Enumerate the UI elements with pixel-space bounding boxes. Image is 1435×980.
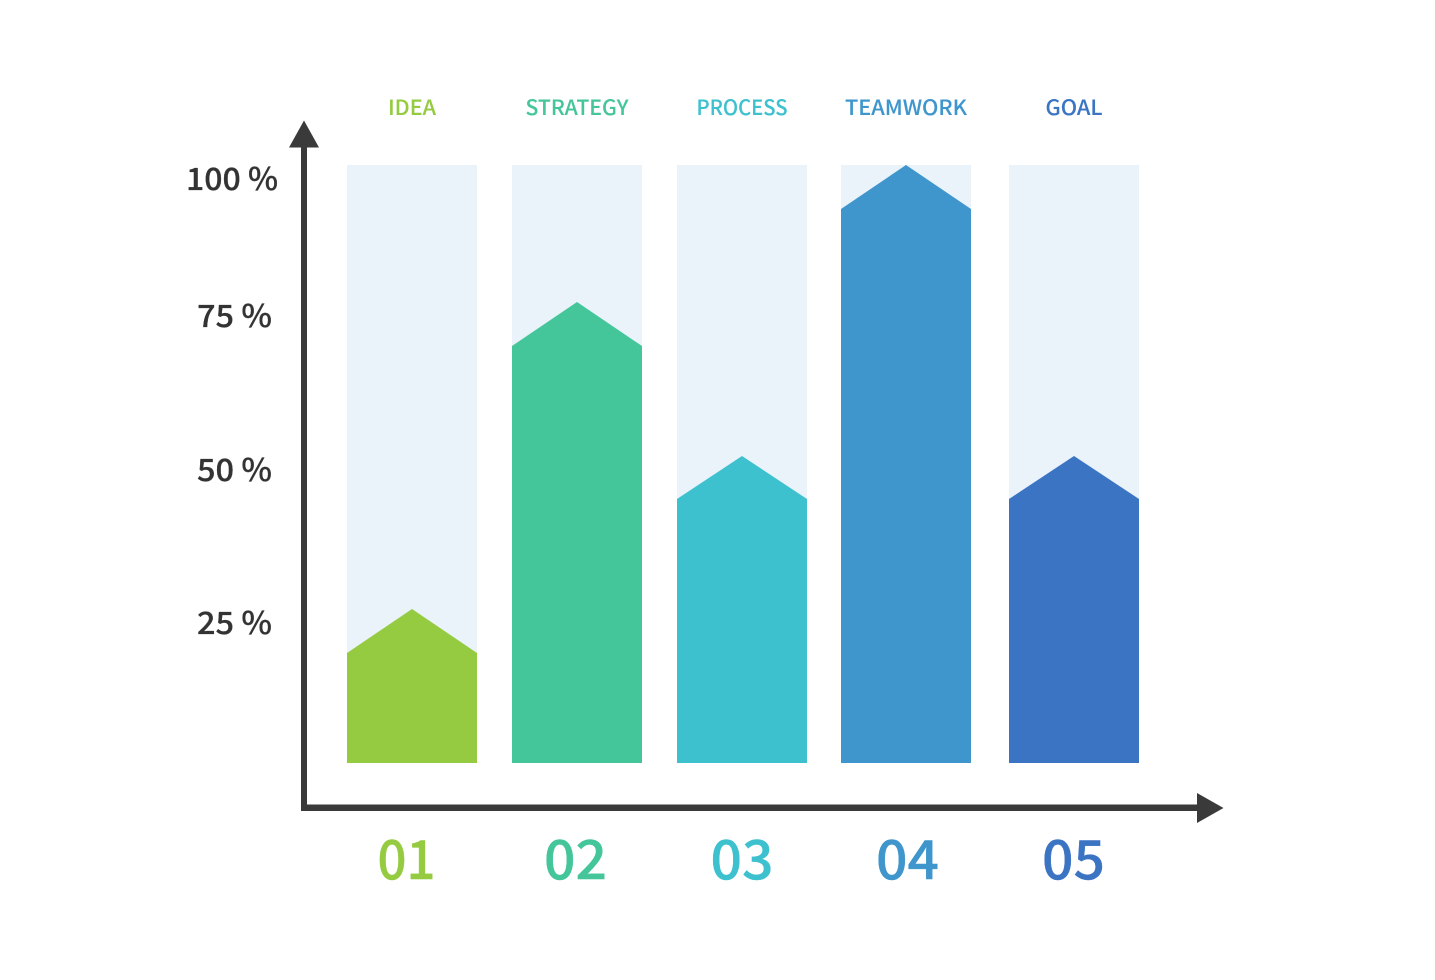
x axis line [301, 804, 1201, 811]
heading: strategy: STRATEGY [526, 92, 629, 122]
column 01: idea [347, 92, 477, 895]
number: 02: 02 [544, 816, 607, 895]
track: goal [1009, 165, 1139, 763]
x axis arrowhead [1197, 793, 1224, 823]
track: process [677, 165, 807, 763]
label: 25 %: 25 % [197, 598, 272, 643]
label: 100 %: 100 % [186, 154, 278, 199]
chart axes with arrows [289, 120, 1224, 823]
heading: teamwork: TEAMWORK [845, 92, 967, 122]
heading: idea: IDEA [388, 92, 437, 122]
label: 50 %: 50 % [197, 445, 272, 490]
number: 04: 04 [876, 816, 939, 895]
arrow bar: process [677, 456, 807, 763]
column 03: process [677, 92, 807, 895]
track: strategy [512, 165, 642, 763]
arrow bar: strategy [512, 302, 642, 763]
arrow bar: idea [347, 609, 477, 763]
number: 01: 01 [378, 816, 436, 895]
number: 03: 03 [710, 816, 774, 895]
y axis arrowhead [289, 120, 319, 148]
track: idea [347, 165, 477, 763]
label: 75 %: 75 % [197, 291, 272, 336]
arrow bar: teamwork [841, 165, 971, 763]
column 05: goal [1009, 92, 1139, 895]
y axis line [301, 140, 307, 811]
arrow bar: goal [1009, 456, 1139, 763]
y axis labels [186, 154, 278, 643]
column 04: teamwork [841, 92, 971, 895]
heading: goal: GOAL [1046, 92, 1103, 122]
track: teamwork [841, 165, 971, 763]
column 02: strategy [512, 92, 642, 895]
heading: process: PROCESS [696, 92, 788, 122]
number: 05: 05 [1042, 816, 1105, 895]
